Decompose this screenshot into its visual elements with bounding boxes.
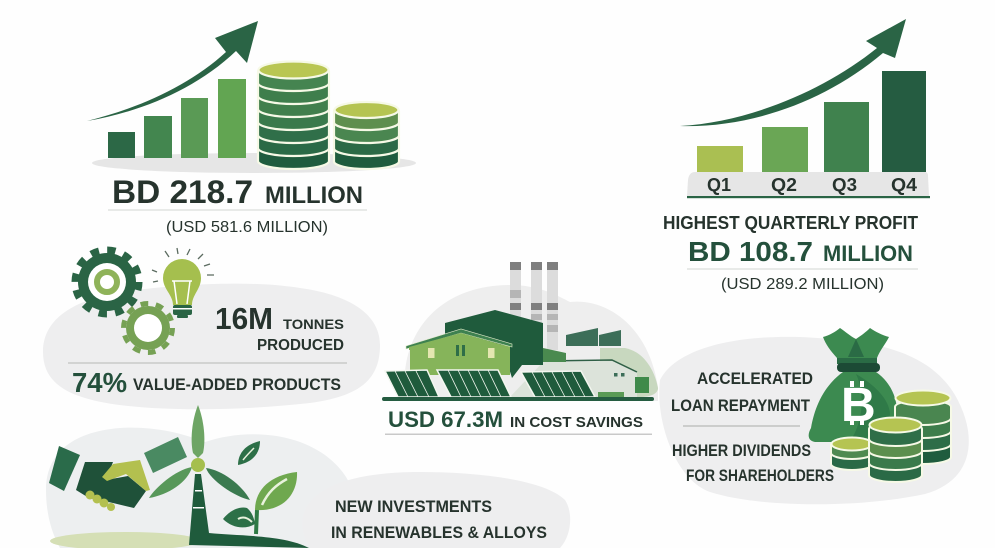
icon: light gear xyxy=(124,304,172,352)
panel: cost savings xyxy=(382,262,658,435)
icon: large coin stack xyxy=(258,62,329,169)
panel: annual profit xyxy=(87,21,416,236)
fingers xyxy=(86,490,115,511)
icon: back coin stack xyxy=(895,390,951,464)
background blob left xyxy=(46,428,355,548)
label: highest quarterly profit: HIGHEST QUARTERLY PROFIT xyxy=(663,213,918,233)
panel: shareholder returns xyxy=(659,328,969,504)
panel: quarterly profit xyxy=(663,19,930,293)
label: value-added products: VALUE-ADDED PRODUCTS xyxy=(133,375,341,394)
label: produced: PRODUCED xyxy=(257,337,344,354)
label: in cost savings: IN COST SAVINGS xyxy=(510,414,643,431)
quarter labels: Q1 xyxy=(707,174,731,195)
quarter labels: Q2 xyxy=(771,174,797,195)
quarter labels xyxy=(707,174,918,195)
icon: dark factory xyxy=(445,310,543,378)
figure: 16M: 16M xyxy=(215,301,273,336)
quarter labels: Q4 xyxy=(891,174,918,195)
axis base xyxy=(687,172,929,196)
icon: handshake xyxy=(49,437,187,511)
heading unit: million: MILLION xyxy=(265,182,363,209)
bar chart xyxy=(108,79,246,158)
bar chart xyxy=(697,71,926,172)
background blob right xyxy=(302,472,570,548)
background blob xyxy=(659,337,969,504)
figure unit: million: MILLION xyxy=(823,241,913,266)
icon: rising arrow xyxy=(87,21,258,121)
label: accelerated: ACCELERATED xyxy=(697,370,813,388)
icon: small coin stack xyxy=(334,102,399,169)
quarter labels: Q3 xyxy=(832,174,857,195)
icon: left coin stack xyxy=(831,438,873,470)
ground shadow xyxy=(92,153,416,173)
label: tonnes: TONNES xyxy=(283,316,344,332)
icon: rising arrow xyxy=(680,19,906,126)
label: in renewables and alloys: IN RENEWABLES & ALLOYS xyxy=(331,524,547,542)
icon: solar panels xyxy=(385,370,595,397)
ground bar xyxy=(382,397,654,401)
icon: front coin stack xyxy=(869,418,922,482)
icon: light bulb xyxy=(152,248,214,318)
icon: right building xyxy=(510,348,658,397)
figure: 74%: 74% xyxy=(72,367,127,398)
background blob xyxy=(43,284,380,409)
label: new investments: NEW INVESTMENTS xyxy=(335,498,492,516)
icon: green building xyxy=(406,329,512,375)
icon: chimneys xyxy=(510,262,558,350)
figure: USD 67.3M: USD 67.3M xyxy=(388,407,503,432)
subtext: USD 581.6 million: (USD 581.6 MILLION) xyxy=(166,219,328,236)
label: for shareholders: FOR SHAREHOLDERS xyxy=(686,467,834,485)
icon: dark gear xyxy=(75,250,139,314)
heading: BD 218.7 million: BD 218.7 xyxy=(112,174,253,210)
ground xyxy=(50,532,200,548)
figure: BD 108.7: BD 108.7 xyxy=(688,236,813,267)
icon: money bag xyxy=(809,328,897,442)
icon: plant xyxy=(223,441,297,534)
subtext: USD 289.2 million: (USD 289.2 MILLION) xyxy=(721,276,884,293)
panel: investments xyxy=(46,405,570,548)
panel: production xyxy=(43,248,380,409)
bitcoin symbol: B xyxy=(841,379,876,432)
icon: rear roofs xyxy=(566,328,621,346)
label: higher dividends: HIGHER DIVIDENDS xyxy=(672,442,811,460)
background blobs xyxy=(405,285,658,401)
icon: wind turbine xyxy=(149,405,309,548)
label: loan repayment: LOAN REPAYMENT xyxy=(671,397,810,415)
